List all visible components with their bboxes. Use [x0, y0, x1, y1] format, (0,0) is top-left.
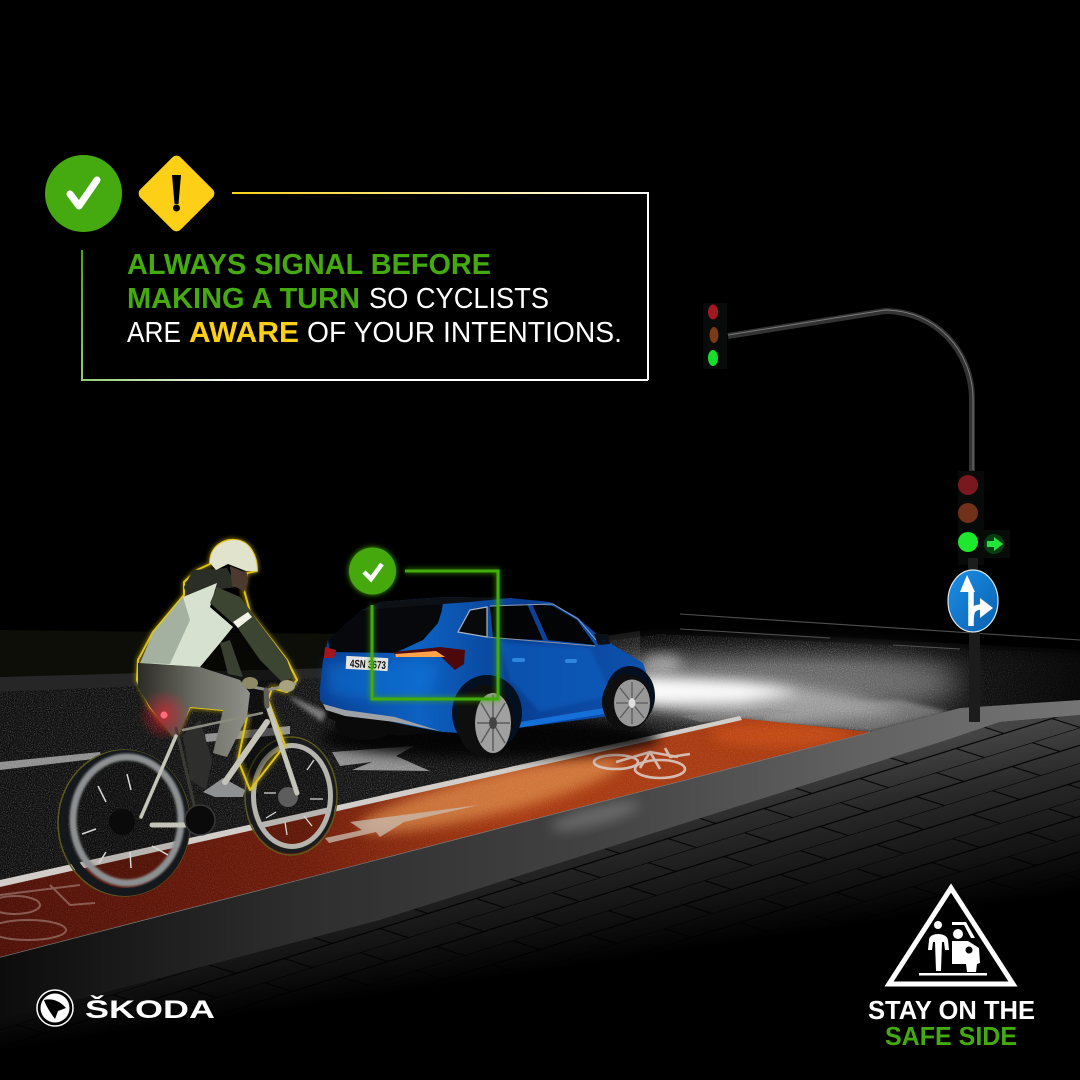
line 2: SO CYCLISTS: [369, 283, 549, 315]
bicycle frame: [141, 684, 297, 825]
car ground shadow: [320, 718, 660, 758]
road markings: [0, 708, 800, 771]
front wheel: [602, 674, 652, 730]
upper traffic light: [703, 303, 727, 369]
small check badge: [349, 548, 396, 594]
warning triangle: [889, 888, 1013, 984]
front wheel arch: [605, 666, 655, 726]
lane arrow: [325, 805, 479, 843]
icon: yellow warning diamond: [136, 153, 217, 234]
message text: [127, 249, 622, 349]
far roadside verge: [0, 630, 340, 677]
far lane lines: [680, 614, 1080, 649]
rear red glow: [138, 689, 190, 741]
logo emblem: [37, 990, 73, 1026]
near arm sleeve: [210, 587, 293, 683]
roof: [362, 597, 510, 610]
rear window: [328, 603, 443, 653]
lane bicycle symbol: [594, 748, 690, 778]
slogan line 1: STAY ON THE: [868, 995, 1035, 1025]
hood: [184, 568, 237, 597]
rear quarter highlight: [325, 662, 440, 700]
ground line: [919, 973, 987, 976]
lit asphalt patch: [760, 700, 950, 732]
kerb stone: [0, 700, 1080, 1020]
paver joints: [0, 715, 1080, 1080]
rear bumper chrome: [323, 704, 440, 731]
kerb bottom edge on lane: [0, 732, 870, 957]
slogan line 2: SAFE SIDE: [885, 1021, 1017, 1051]
kerb strip behind cyclist: [0, 668, 330, 692]
lit asphalt glow: [580, 646, 960, 718]
asphalt far fade: [640, 620, 1080, 665]
panel frame left and bottom: [82, 250, 648, 380]
bicycle headlight beam: [290, 696, 326, 722]
line 3: AWARE: [189, 317, 299, 349]
rear bicycle wheel: [58, 750, 190, 896]
door handles: [512, 658, 577, 663]
lane bicycle symbol near left edge: [0, 885, 95, 940]
hands: [242, 677, 295, 692]
rear wheel arch: [452, 675, 522, 751]
slogan: [868, 995, 1035, 1051]
main traffic light: [958, 471, 984, 565]
cyclist with bicycle: [58, 540, 337, 896]
shoe: [203, 778, 245, 797]
hub and chainring: [109, 805, 215, 835]
Skoda logo: [37, 990, 215, 1026]
logo wordmark: ŠKODA: [85, 994, 215, 1024]
far arm sleeve: [220, 640, 243, 677]
arm band: [233, 612, 252, 628]
line 2: MAKING A TURN: [127, 283, 360, 315]
direction sign: [948, 570, 998, 632]
side windows: [458, 604, 596, 646]
street scene: [0, 614, 1080, 1030]
door shading: [500, 642, 612, 712]
car body: [320, 597, 651, 733]
rocker highlight: [518, 708, 604, 728]
vest shading: [140, 597, 190, 664]
mirror: [594, 634, 610, 645]
rear wheel: [457, 685, 513, 757]
icon: green check circle: [45, 155, 122, 232]
lower far leg: [183, 720, 212, 790]
lane light glow: [354, 723, 850, 847]
face: [230, 566, 248, 592]
cyclist yellow outline: [137, 540, 297, 790]
headlight flare: [642, 654, 682, 670]
green car highlight box with check: [349, 548, 498, 699]
line 3: ARE: [127, 317, 181, 349]
vest: [140, 583, 233, 667]
line 1: ALWAYS SIGNAL BEFORE: [127, 249, 491, 281]
road noise texture: [0, 634, 1080, 882]
pole segment between light and sign: [968, 558, 978, 578]
rear bumper dark: [322, 706, 440, 736]
turn arrow signal: [983, 530, 1010, 558]
message panel: [45, 153, 648, 380]
stay on the safe side badge: [868, 888, 1035, 1051]
rear red light: [160, 712, 168, 718]
cyclist pictogram: [928, 921, 949, 971]
sidewalk paving: [0, 715, 1080, 1080]
front bicycle wheel: [245, 737, 337, 855]
traffic light pole and arm: [703, 303, 1010, 722]
tail light: [394, 647, 465, 670]
kerb bright spot: [548, 795, 642, 837]
car: [320, 597, 660, 758]
lane edge line: [0, 716, 742, 887]
leg: [138, 663, 250, 757]
licence plate: 4SN 3673: [350, 658, 386, 672]
asphalt road: [0, 628, 1080, 882]
line 3: OF YOUR INTENTIONS.: [307, 317, 622, 349]
pole: [728, 311, 972, 480]
lane grain: [0, 718, 870, 957]
lower pole: [969, 630, 980, 722]
licence plate: [346, 656, 388, 672]
rear wheel far side: [335, 710, 395, 740]
tail light strip: [395, 651, 445, 657]
red cycle lane: [0, 718, 870, 957]
helmet: [210, 540, 257, 571]
highlight bracket: [372, 571, 498, 699]
left tail light: [324, 647, 336, 658]
headlight pool on road: [640, 672, 905, 722]
front disc brake: [278, 787, 298, 807]
panel frame top and right: [232, 193, 648, 380]
car pictogram: [952, 922, 980, 972]
pole highlight: [728, 310, 973, 470]
